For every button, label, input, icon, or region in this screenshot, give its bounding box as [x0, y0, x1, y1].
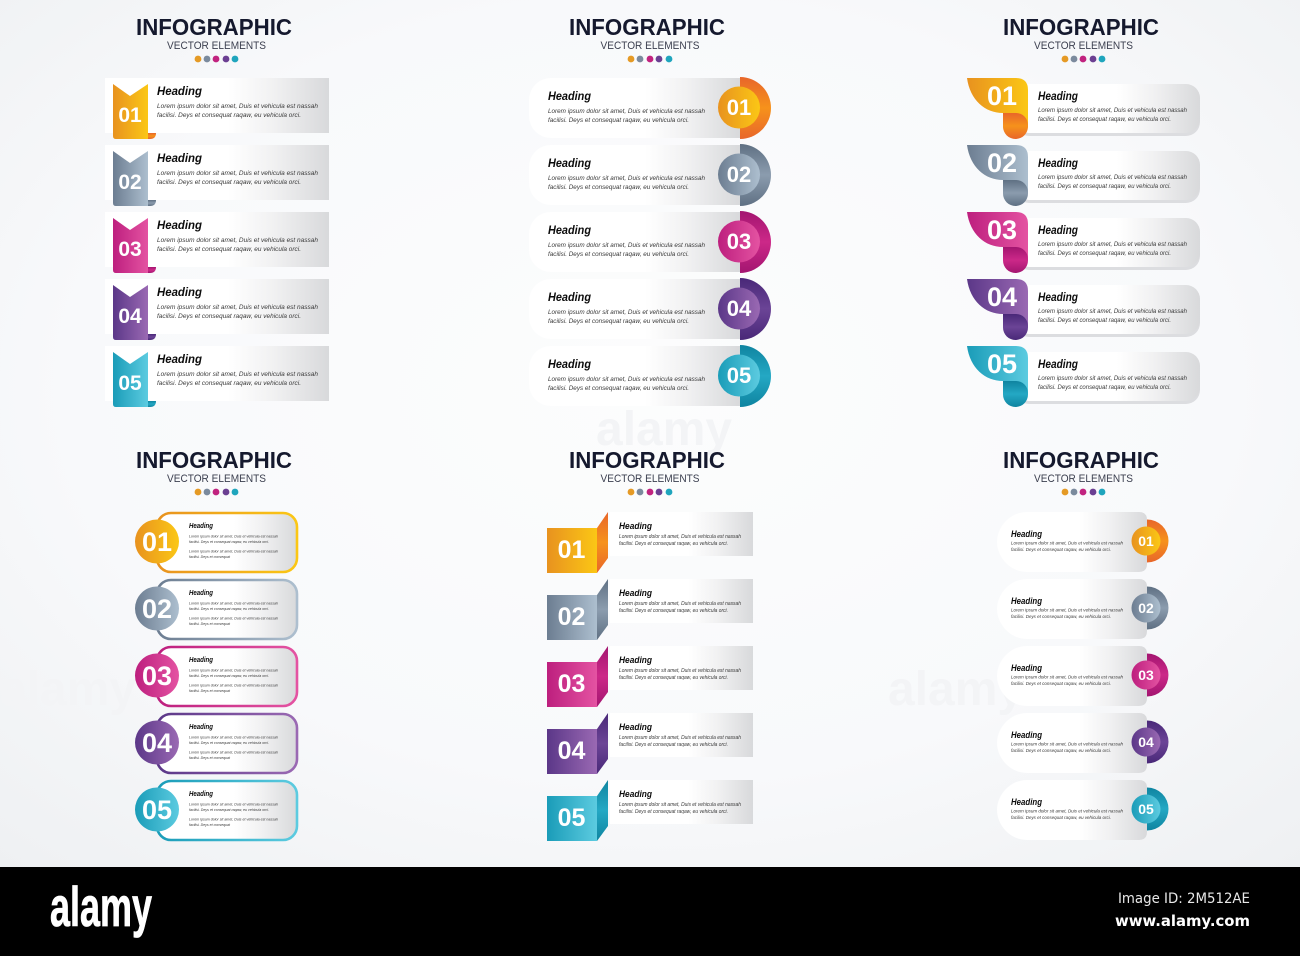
row 03: Heading — [157, 218, 203, 232]
row 03: 03 — [727, 229, 751, 254]
title — [136, 447, 292, 495]
row 04: 04 — [727, 296, 752, 321]
row 05: 05 — [142, 795, 172, 825]
row 02: Heading — [1011, 596, 1042, 606]
row 02: Lorem ipsum dolor sit amet, Duis et vehicula est nassah — [548, 175, 705, 182]
row 03: facilisi. Deys et consequat raqaw, eu vehicula orci. — [157, 246, 301, 253]
row 04 — [967, 279, 1200, 340]
row 05: 05 — [118, 372, 142, 395]
row 02 — [967, 145, 1200, 206]
row 05: Heading — [548, 357, 592, 371]
row 05: Lorem ipsum dolor sit amet, Duis et vehicula est nassah — [548, 376, 705, 383]
row 05: facilisi. Deys et consequat raqaw, eu vehicula orci. — [1038, 384, 1171, 391]
website: www.alamy.com — [1115, 912, 1250, 930]
row 01: facilisi. Deys et consequat raqaw, eu vehicula orci. — [189, 540, 269, 544]
row 01: facilisi. Deys et consequat raqaw, eu vehicula orci. — [157, 112, 301, 119]
row 04 — [105, 279, 329, 340]
watermark: alamy — [596, 403, 732, 456]
title: INFOGRAPHIC — [136, 14, 292, 40]
row 05: 05 — [1138, 801, 1154, 817]
row 03: Lorem ipsum dolor sit amet, Duis et vehicula est nassah — [157, 237, 318, 244]
row 05 — [529, 345, 771, 407]
title — [569, 447, 725, 495]
title: VECTOR ELEMENTS — [167, 473, 266, 485]
row 05: Lorem ipsum dolor sit amet, Duis et vehicula est nassah — [1038, 375, 1187, 382]
row 03: Lorem ipsum dolor sit amet, Duis et vehicula est nassah — [189, 684, 278, 688]
row 01: Lorem ipsum dolor sit amet, Duis et vehicula est nassah — [548, 108, 705, 115]
title: VECTOR ELEMENTS — [1034, 473, 1133, 485]
row 02: 02 — [142, 594, 172, 624]
row 03: 03 — [118, 238, 142, 261]
row 04: 04 — [987, 282, 1017, 312]
alamy logo: alamy — [50, 875, 152, 938]
row 02: Lorem ipsum dolor sit amet, Duis et vehicula est nassah — [619, 601, 741, 607]
row 03: Lorem ipsum dolor sit amet, Duis et vehicula est nassah — [189, 668, 278, 672]
panel: ribbon list — [105, 14, 329, 407]
row 01 — [997, 512, 1168, 572]
row 04: 04 — [558, 737, 585, 765]
row 05: Heading — [1011, 797, 1042, 807]
row 03: 03 — [987, 215, 1017, 245]
row 01: 01 — [558, 536, 585, 564]
row 01: facilisi. Deys et consequat — [189, 555, 231, 559]
title: VECTOR ELEMENTS — [167, 40, 266, 52]
panel: half circle pills — [529, 14, 771, 407]
row 03: Heading — [619, 655, 652, 666]
title — [136, 14, 292, 62]
row 03: Lorem ipsum dolor sit amet, Duis et vehicula est nassah — [619, 668, 741, 674]
image id: Image ID: 2M512AE — [1118, 891, 1250, 907]
title: VECTOR ELEMENTS — [600, 473, 700, 485]
row 04: Heading — [1011, 730, 1042, 740]
row 03: facilisi. Deys et consequat raqaw, eu vehicula orci. — [1011, 681, 1111, 687]
row 02 — [105, 145, 329, 206]
row 03: 03 — [1138, 667, 1154, 683]
title — [1003, 14, 1159, 62]
row 02: facilisi. Deys et consequat raqaw, eu vehicula orci. — [1011, 614, 1111, 620]
row 05 — [967, 346, 1200, 407]
row 02: Lorem ipsum dolor sit amet, Duis et vehicula est nassah — [1038, 174, 1187, 181]
row 04: 04 — [118, 305, 142, 328]
row 03: 03 — [558, 670, 585, 698]
row 05 — [105, 346, 329, 407]
row 04: Lorem ipsum dolor sit amet, Duis et vehicula est nassah — [1038, 308, 1187, 315]
row 01: Lorem ipsum dolor sit amet, Duis et vehicula est nassah — [1038, 107, 1187, 114]
row 01: 01 — [987, 81, 1017, 111]
row 04: Heading — [189, 724, 214, 731]
row 02: Heading — [157, 151, 203, 165]
title: INFOGRAPHIC — [1003, 14, 1159, 40]
row 05: Heading — [157, 352, 203, 366]
row 03: facilisi. Deys et consequat raqaw, eu vehicula orci. — [548, 251, 689, 258]
row 02: Lorem ipsum dolor sit amet, Duis et vehicula est nassah — [157, 170, 318, 177]
title: INFOGRAPHIC — [1003, 447, 1159, 473]
row 02: Heading — [548, 156, 592, 170]
panel: outlined cards — [135, 447, 297, 840]
row 03: facilisi. Deys et consequat — [189, 689, 231, 693]
row 04: Lorem ipsum dolor sit amet, Duis et vehicula est nassah — [189, 736, 278, 740]
row 03: facilisi. Deys et consequat raqaw, eu vehicula orci. — [1038, 250, 1171, 257]
row 05: 05 — [558, 804, 585, 832]
row 04: 04 — [1138, 734, 1154, 750]
row 02: 02 — [727, 162, 751, 187]
row 02 — [135, 580, 297, 639]
row 01: Heading — [157, 84, 203, 98]
row 01: Heading — [189, 523, 214, 530]
row 05: facilisi. Deys et consequat raqaw, eu vehicula orci. — [189, 808, 269, 812]
row 05 — [135, 781, 297, 840]
row 01 — [967, 78, 1200, 139]
row 04: facilisi. Deys et consequat raqaw, eu vehicula orci. — [189, 741, 269, 745]
row 02: Lorem ipsum dolor sit amet, Duis et vehicula est nassah — [189, 602, 278, 606]
row 01: Heading — [1011, 529, 1042, 539]
row 01: 01 — [118, 104, 142, 127]
row 02 — [529, 144, 771, 206]
row 04: facilisi. Deys et consequat — [189, 756, 231, 760]
row 02: Lorem ipsum dolor sit amet, Duis et vehicula est nassah — [1011, 608, 1123, 614]
row 03 — [105, 212, 329, 273]
row 05: Heading — [619, 789, 652, 800]
row 04: facilisi. Deys et consequat raqaw, eu vehicula orci. — [157, 313, 301, 320]
row 01: Lorem ipsum dolor sit amet, Duis et vehicula est nassah — [157, 103, 318, 110]
row 02: facilisi. Deys et consequat raqaw, eu vehicula orci. — [1038, 183, 1171, 190]
row 05: Lorem ipsum dolor sit amet, Duis et vehicula est nassah — [189, 818, 278, 822]
row 04 — [547, 713, 753, 774]
row 03: Lorem ipsum dolor sit amet, Duis et vehicula est nassah — [548, 242, 705, 249]
watermark: alamy — [888, 663, 1024, 716]
row 05: facilisi. Deys et consequat raqaw, eu vehicula orci. — [1011, 815, 1111, 821]
row 05: facilisi. Deys et consequat raqaw, eu vehicula orci. — [548, 385, 689, 392]
row 01 — [135, 513, 297, 572]
row 02: facilisi. Deys et consequat raqaw, eu vehicula orci. — [619, 608, 728, 614]
row 01: 01 — [727, 95, 751, 120]
row 02: facilisi. Deys et consequat raqaw, eu vehicula orci. — [157, 179, 301, 186]
row 05: facilisi. Deys et consequat — [189, 823, 231, 827]
row 04: facilisi. Deys et consequat raqaw, eu vehicula orci. — [548, 318, 689, 325]
row 02: Heading — [1038, 156, 1079, 170]
row 05: facilisi. Deys et consequat raqaw, eu vehicula orci. — [619, 809, 728, 815]
row 01: Heading — [548, 89, 592, 103]
row 05: 05 — [987, 349, 1017, 379]
row 01 — [529, 77, 771, 139]
row 01: Lorem ipsum dolor sit amet, Duis et vehicula est nassah — [1011, 540, 1123, 546]
row 04: Heading — [619, 722, 652, 733]
row 05: Lorem ipsum dolor sit amet, Duis et vehicula est nassah — [189, 802, 278, 806]
row 03 — [967, 212, 1200, 273]
row 04: Heading — [548, 290, 592, 304]
row 01: facilisi. Deys et consequat raqaw, eu vehicula orci. — [1011, 547, 1111, 553]
row 04 — [529, 278, 771, 340]
row 02: 02 — [987, 148, 1017, 178]
footer bar — [0, 867, 1300, 956]
row 03: Heading — [548, 223, 592, 237]
row 03: Lorem ipsum dolor sit amet, Duis et vehicula est nassah — [1038, 241, 1187, 248]
row 04 — [135, 714, 297, 773]
row 04: Heading — [1038, 290, 1079, 304]
row 04: facilisi. Deys et consequat raqaw, eu vehicula orci. — [619, 742, 728, 748]
panel: leaf tabs — [967, 14, 1200, 407]
row 03: Heading — [189, 657, 214, 664]
row 01: Lorem ipsum dolor sit amet, Duis et vehicula est nassah — [189, 534, 278, 538]
row 02 — [997, 579, 1168, 639]
title: VECTOR ELEMENTS — [600, 40, 700, 52]
row 02: 02 — [118, 171, 142, 194]
row 03 — [547, 646, 753, 707]
row 02: facilisi. Deys et consequat raqaw, eu vehicula orci. — [189, 607, 269, 611]
panel: 3D blocks — [547, 447, 753, 841]
panel: soft pills with small circles — [997, 447, 1168, 840]
row 02: facilisi. Deys et consequat — [189, 622, 231, 626]
row 04: Lorem ipsum dolor sit amet, Duis et vehicula est nassah — [619, 735, 741, 741]
row 02: Heading — [189, 590, 214, 597]
row 01: Lorem ipsum dolor sit amet, Duis et vehicula est nassah — [619, 534, 741, 540]
watermark: alamy — [0, 663, 136, 716]
row 01: Lorem ipsum dolor sit amet, Duis et vehicula est nassah — [189, 550, 278, 554]
title — [1003, 447, 1159, 495]
row 02: 02 — [558, 603, 585, 631]
row 02: facilisi. Deys et consequat raqaw, eu vehicula orci. — [548, 184, 689, 191]
row 01 — [547, 512, 753, 573]
title: INFOGRAPHIC — [136, 447, 292, 473]
row 01: facilisi. Deys et consequat raqaw, eu vehicula orci. — [619, 541, 728, 547]
row 03: Heading — [1011, 663, 1042, 673]
row 01: Heading — [619, 521, 652, 532]
row 05 — [547, 780, 753, 841]
row 02: 02 — [1138, 600, 1154, 616]
row 05: Heading — [189, 791, 214, 798]
row 05: Heading — [1038, 357, 1079, 371]
row 04: Lorem ipsum dolor sit amet, Duis et vehicula est nassah — [157, 304, 318, 311]
row 05: 05 — [727, 363, 751, 388]
row 04: facilisi. Deys et consequat raqaw, eu vehicula orci. — [1011, 748, 1111, 754]
row 04: Lorem ipsum dolor sit amet, Duis et vehicula est nassah — [1011, 742, 1123, 748]
row 05 — [997, 780, 1168, 840]
row 05: facilisi. Deys et consequat raqaw, eu vehicula orci. — [157, 380, 301, 387]
title — [569, 14, 725, 62]
row 01 — [105, 78, 329, 139]
row 02: Lorem ipsum dolor sit amet, Duis et vehicula est nassah — [189, 616, 278, 620]
row 03: Heading — [1038, 223, 1079, 237]
row 01: facilisi. Deys et consequat raqaw, eu vehicula orci. — [548, 117, 689, 124]
row 04: Heading — [157, 285, 203, 299]
row 04: 04 — [142, 728, 172, 758]
title: INFOGRAPHIC — [569, 14, 725, 40]
row 04: Lorem ipsum dolor sit amet, Duis et vehicula est nassah — [189, 750, 278, 754]
row 04 — [997, 713, 1168, 773]
title: VECTOR ELEMENTS — [1034, 40, 1133, 52]
row 01: 01 — [142, 527, 172, 557]
row 03 — [135, 647, 297, 706]
row 03: facilisi. Deys et consequat raqaw, eu vehicula orci. — [619, 675, 728, 681]
row 03 — [997, 646, 1168, 706]
row 04: Lorem ipsum dolor sit amet, Duis et vehicula est nassah — [548, 309, 705, 316]
row 05: Lorem ipsum dolor sit amet, Duis et vehicula est nassah — [1011, 808, 1123, 814]
watermark — [0, 403, 1024, 716]
row 04: facilisi. Deys et consequat raqaw, eu vehicula orci. — [1038, 317, 1171, 324]
row 03: facilisi. Deys et consequat raqaw, eu vehicula orci. — [189, 674, 269, 678]
row 03: 03 — [142, 661, 172, 691]
row 02 — [547, 579, 753, 640]
row 01: Heading — [1038, 89, 1079, 103]
row 01: 01 — [1138, 533, 1154, 549]
title: INFOGRAPHIC — [569, 447, 725, 473]
row 02: Heading — [619, 588, 652, 599]
row 03 — [529, 211, 771, 273]
row 05: Lorem ipsum dolor sit amet, Duis et vehicula est nassah — [619, 802, 741, 808]
row 05: Lorem ipsum dolor sit amet, Duis et vehicula est nassah — [157, 371, 318, 378]
row 01: facilisi. Deys et consequat raqaw, eu vehicula orci. — [1038, 116, 1171, 123]
row 03: Lorem ipsum dolor sit amet, Duis et vehicula est nassah — [1011, 674, 1123, 680]
